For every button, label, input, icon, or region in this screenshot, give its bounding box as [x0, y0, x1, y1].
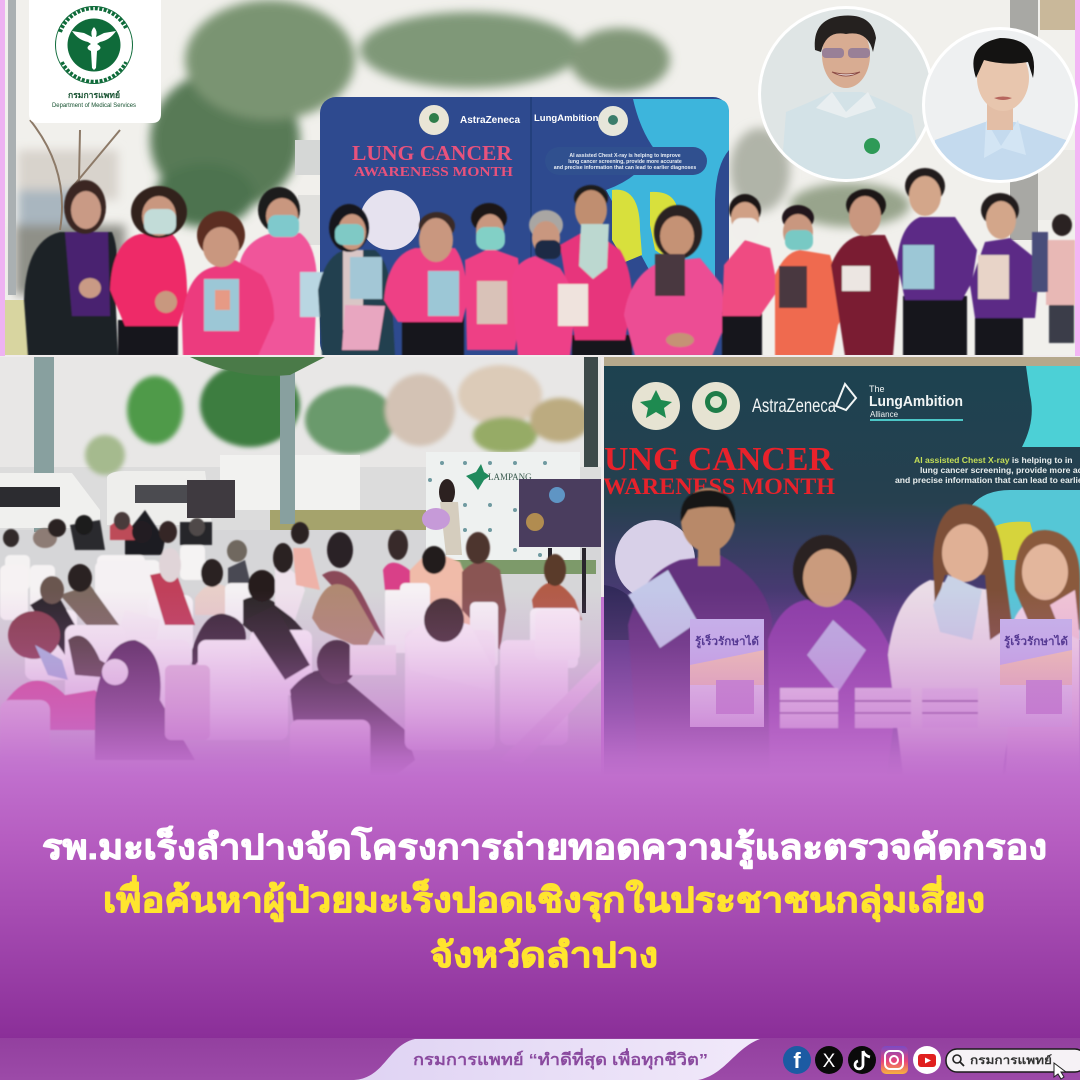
- LungAmbition Alliance text: The: [869, 384, 885, 394]
- Ministry of Public Health logo card: [29, 0, 161, 123]
- headline line 1: รพ.มะเร็งลำปางจัดโครงการถ่ายทอดความรู้และตรวจคัดกรอง: [42, 825, 1047, 869]
- banner description: [545, 147, 707, 175]
- slogan ribbon: [354, 1039, 760, 1080]
- slogan ribbon: กรมการแพทย์ “ทำดีที่สุด เพื่อทุกชีวิต”: [413, 1048, 708, 1070]
- department name: Department of Medical Services: [52, 102, 137, 109]
- backdrop banner: [320, 97, 729, 359]
- person 15: [970, 193, 1040, 356]
- photo: group at Lung Cancer Awareness backdrop: [5, 0, 1075, 359]
- front rows: [2, 597, 582, 766]
- banner heading: AWARENESS MONTH: [354, 164, 514, 179]
- icon: facebook: f: [793, 1048, 801, 1073]
- woman 3: [888, 504, 1018, 790]
- person 4: [240, 187, 329, 356]
- person 7: [465, 203, 522, 350]
- banner description: AI assisted Chest X-ray is helping to improve: [569, 153, 681, 159]
- brochure stacks: [780, 688, 978, 728]
- venue scenery: [0, 357, 601, 790]
- photo: seminar audience: [0, 357, 603, 790]
- banner sponsor text: AstraZeneca: [460, 115, 520, 126]
- photo gutters: [0, 354, 1080, 597]
- person 3: [182, 211, 274, 356]
- stage backdrop with Lampang logo: LAMPANG: [488, 472, 532, 482]
- icon: facebook: [783, 1046, 811, 1074]
- gradient fade over lower photos: [0, 590, 1080, 776]
- headline line 2: เพื่อค้นหาผู้ป่วยมะเร็งปอดเชิงรุกในประชาชนกลุ่มเสี่ยง: [103, 875, 985, 922]
- audience: [0, 510, 601, 790]
- speaker with flowers: [422, 479, 462, 555]
- emblem: [56, 6, 132, 84]
- woman 2: [768, 535, 900, 790]
- scenery: [5, 0, 1075, 355]
- vans: [0, 471, 212, 528]
- photo: staff with brochures: [603, 357, 1080, 790]
- footer bar: [0, 1038, 1080, 1080]
- department name: กรมการแพทย์: [68, 90, 120, 100]
- woman 4: [1005, 530, 1080, 790]
- heading on backdrop: WARENESS MONTH: [603, 474, 835, 499]
- portrait: executive 2: [922, 27, 1078, 185]
- standing posters: [690, 619, 1072, 727]
- headline line 3: จังหวัดลำปาง: [430, 936, 658, 975]
- banner logos: [419, 105, 628, 136]
- backdrop logos: [632, 382, 740, 430]
- headline: [42, 825, 1047, 975]
- AstraZeneca logo text: AstraZeneca: [752, 396, 836, 417]
- description on backdrop: AI assisted Chest X-ray is helping to in: [914, 455, 1073, 465]
- AstraZeneca logo text: [752, 384, 856, 417]
- banner heading: LUNG CANCER: [352, 141, 513, 165]
- banner sponsor text: [460, 114, 598, 123]
- banner description: and precise information that can lead to earlier diagnoses: [554, 165, 696, 171]
- LungAmbition Alliance text: [869, 384, 963, 421]
- held brochures: [628, 570, 1080, 692]
- LungAmbition Alliance text: Alliance: [870, 410, 899, 419]
- banner heading: [352, 146, 513, 176]
- standing posters: รู้เร็วรักษาได้: [1004, 634, 1068, 649]
- heading on backdrop: [603, 441, 835, 499]
- person 10: [624, 205, 725, 356]
- side strips: [0, 0, 1080, 356]
- far rows: [3, 510, 212, 620]
- description on backdrop: [895, 455, 1080, 485]
- person 14: [897, 168, 977, 356]
- banner sponsor text: LungAmbition: [534, 113, 599, 124]
- portrait: executive 1: [755, 5, 935, 190]
- icon: X: X: [823, 1051, 836, 1072]
- person 2: [110, 186, 187, 356]
- department name: [52, 90, 137, 109]
- backdrop: [604, 357, 1080, 787]
- standing posters: รู้เร็วรักษาได้: [695, 634, 759, 649]
- person 5: [318, 204, 395, 356]
- man: [628, 488, 772, 790]
- LungAmbition Alliance text: LungAmbition: [869, 393, 963, 410]
- person 12: [775, 205, 847, 356]
- search box: [946, 1049, 1080, 1079]
- icon: youtube: [913, 1046, 941, 1074]
- icon: instagram: [881, 1046, 908, 1074]
- staff people: [628, 488, 1080, 790]
- people row: [24, 168, 1075, 356]
- icon: tiktok: [848, 1046, 876, 1074]
- person 11: [722, 194, 778, 356]
- icon: cursor: [1054, 1063, 1066, 1079]
- person 1: [24, 180, 118, 356]
- person 13: [831, 189, 900, 356]
- banner description: lung cancer screening, provide more accurate: [568, 159, 682, 165]
- person 6: [384, 212, 468, 356]
- presentation screen: [519, 479, 603, 613]
- stage backdrop with Lampang logo: [426, 452, 596, 574]
- bystanders right: [1032, 214, 1075, 343]
- icon: X: [815, 1046, 843, 1074]
- person 9: [560, 185, 632, 356]
- middle rows: [0, 522, 582, 680]
- heading on backdrop: UNG CANCER: [604, 441, 833, 478]
- person 8: [511, 210, 588, 356]
- small screen: [187, 480, 235, 518]
- search box: กรมการแพทย์: [970, 1054, 1052, 1067]
